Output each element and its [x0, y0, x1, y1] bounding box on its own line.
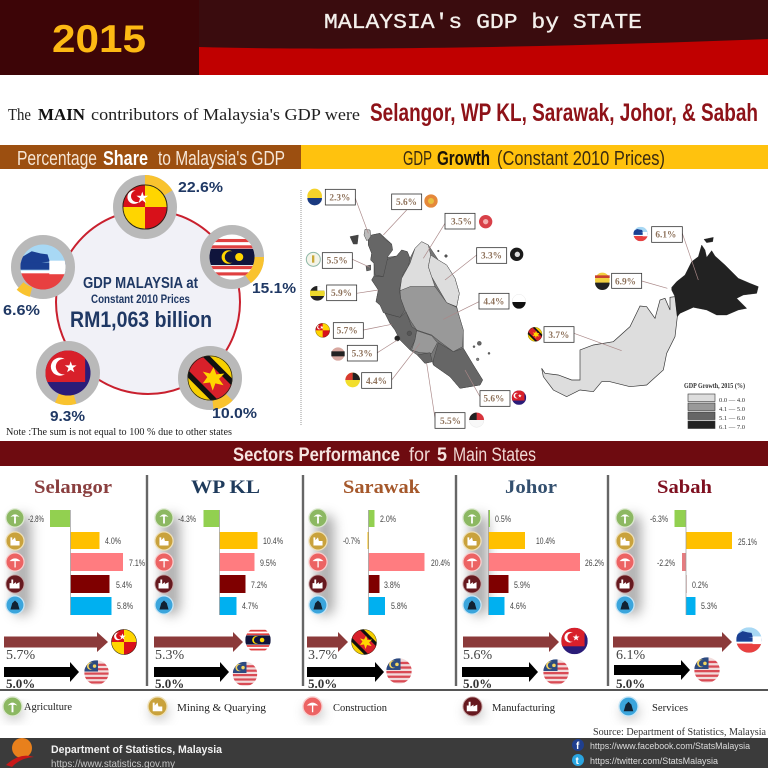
- legend: agriculture: [3, 697, 72, 716]
- state name: Sabah: [657, 477, 712, 498]
- bar chart: 25.1%: [738, 537, 757, 548]
- legend: construction: Construction: [333, 702, 387, 714]
- map legend: 5.1 — 6.0: [719, 415, 745, 422]
- section header: percentage share: Share: [103, 148, 148, 170]
- arrow: state growth: [613, 627, 762, 663]
- year: 2015: [52, 18, 146, 61]
- legend: construction: [303, 697, 387, 716]
- Sarawak shape: [542, 297, 677, 397]
- facebook: https://www.facebook.com/StatsMalaysia: [590, 741, 751, 752]
- panel: Selangor: [4, 477, 145, 691]
- arrow: national growth: [4, 660, 109, 691]
- bar chart: -0.7%: [343, 536, 360, 547]
- badge: Sabah: 6.6%: [3, 302, 40, 319]
- arrow: national growth: 5.0%: [308, 676, 337, 691]
- bar chart: -2.8%: [28, 514, 44, 525]
- bar chart: 7.2%: [251, 580, 267, 591]
- arrow: national growth: 5.0%: [616, 676, 645, 691]
- bar chart: -4.3%: [178, 514, 196, 525]
- headline sentence: contributors of Malaysia's GDP were: [91, 105, 360, 124]
- leader lines: [574, 233, 698, 351]
- bar chart: 5.8%: [391, 601, 407, 612]
- icon column: [616, 509, 641, 615]
- header banner: [0, 0, 768, 75]
- badge: Johor: [41, 346, 95, 425]
- central text: RM1,063 billion: [70, 307, 212, 332]
- title: MALAYSIA's GDP by STATE: [324, 12, 642, 35]
- bar chart: 9.5%: [260, 558, 276, 569]
- label: Johor 5.6%: [480, 390, 526, 406]
- bar chart: 4.0%: [105, 536, 121, 547]
- map: East Malaysia growth: [522, 227, 758, 397]
- badge: Sarawak: [170, 338, 257, 422]
- label: Johor 5.6%: 5.6%: [483, 395, 504, 405]
- label: Melaka 5.5%: [435, 413, 484, 428]
- label: Labuan 6.9%: 6.9%: [615, 277, 636, 287]
- arrow: national growth: [462, 659, 569, 691]
- badge: Sarawak: 10.0%: [212, 405, 257, 422]
- label: Terengganu 3.3%: [477, 248, 523, 263]
- bar chart: [28, 510, 145, 615]
- section header: GDP growth: GDP: [403, 148, 432, 170]
- icon column: [309, 509, 334, 615]
- sector legend: [3, 697, 688, 718]
- bar chart: -2.2%: [657, 558, 675, 569]
- icon column: [6, 509, 31, 615]
- central text: GDP MALAYSIA at: [83, 275, 199, 292]
- footer: [0, 738, 768, 768]
- label: Pahang 4.4%: [479, 293, 526, 309]
- section header: sectors performance: Main States: [453, 445, 536, 466]
- label: Selangor 5.7%: 5.7%: [337, 327, 358, 337]
- source note: Source: Department of Statistics, Malaysia: [593, 727, 766, 738]
- label: Sarawak 3.7%: [522, 322, 574, 347]
- section header: percentage share: to Malaysia's GDP: [158, 148, 285, 170]
- bar chart: 4.7%: [242, 601, 258, 612]
- bar chart: 10.4%: [263, 536, 283, 547]
- arrow: state growth: 5.6%: [463, 648, 492, 663]
- arrow: national growth: 5.0%: [463, 676, 492, 691]
- arrow: state growth: [154, 627, 271, 663]
- label: Perak 5.9%: 5.9%: [331, 289, 352, 299]
- bar chart: 2.0%: [380, 514, 396, 525]
- bar chart: 5.3%: [701, 601, 717, 612]
- label: Labuan 6.9%: [595, 273, 642, 290]
- arrow: state growth: 6.1%: [616, 648, 646, 663]
- legend: services: [619, 697, 688, 716]
- label: Pahang 4.4%: 4.4%: [483, 297, 504, 307]
- arrow: state growth: [4, 629, 137, 663]
- organisation name: Department of Statistics, Malaysia: [51, 744, 223, 756]
- label: Melaka 5.5%: 5.5%: [440, 417, 461, 427]
- arrow: state growth: 3.7%: [308, 648, 338, 663]
- logo: [6, 738, 34, 767]
- map legend: [684, 382, 746, 431]
- legend: agriculture: Agriculture: [24, 701, 72, 713]
- bar chart: [488, 510, 604, 615]
- label: Selangor 5.7%: [315, 323, 363, 338]
- section header: GDP growth: Growth: [437, 148, 490, 170]
- arrow: state growth: [307, 620, 386, 664]
- badge: Selangor: [118, 179, 223, 234]
- bar chart: 20.4%: [431, 558, 450, 569]
- label: Sabah 6.1%: 6.1%: [655, 230, 676, 240]
- central text: [70, 275, 212, 332]
- state shapes: [350, 229, 490, 388]
- bar chart: 10.4%: [536, 536, 555, 547]
- headline sentence: [8, 99, 758, 127]
- section header: GDP growth: (Constant 2010 Prices): [497, 148, 665, 170]
- bar chart: 0.5%: [495, 514, 511, 525]
- label: Terengganu 3.3%: 3.3%: [481, 252, 502, 262]
- legend: mining: Mining & Quarying: [177, 702, 267, 714]
- map: Peninsular Malaysia growth: [306, 189, 526, 428]
- arrow: state growth: 5.3%: [155, 648, 184, 663]
- legend: mining: [148, 697, 267, 716]
- arrow: state growth: [463, 628, 588, 663]
- central circle: [56, 210, 240, 394]
- arrow: national growth: [614, 657, 720, 691]
- arrow: national growth: [307, 658, 412, 691]
- badge: Johor: 9.3%: [50, 408, 85, 425]
- bar chart: [343, 510, 450, 615]
- panel: Sabah: [613, 477, 762, 691]
- section header: sectors performance: [0, 441, 768, 466]
- label: Perlis 2.3%: [307, 189, 355, 205]
- bar chart: 5.8%: [117, 601, 133, 612]
- arrow: national growth: 5.0%: [6, 676, 35, 691]
- bar chart: 5.9%: [514, 580, 530, 591]
- label: Sarawak 3.7%: 3.7%: [548, 331, 569, 341]
- headline sentence: MAIN: [38, 105, 86, 124]
- twitter: https://twitter.com/StatsMalaysia: [590, 756, 719, 767]
- twitter: t: [576, 756, 580, 767]
- state name: Sarawak: [343, 477, 420, 498]
- legend: manufacturing: [463, 697, 555, 716]
- bar chart: [178, 510, 283, 615]
- state name: Selangor: [34, 477, 113, 498]
- bar chart: 26.2%: [585, 558, 604, 569]
- badge: WP Kuala Lumpur: [205, 230, 296, 297]
- central text: Constant 2010 Prices: [91, 292, 190, 306]
- panel: WP KL: [154, 477, 283, 691]
- badge: Selangor: 22.6%: [178, 179, 223, 196]
- panel: Johor: [462, 477, 604, 691]
- badge: WP Kuala Lumpur: 15.1%: [252, 280, 296, 297]
- panel: Sarawak: [307, 477, 450, 691]
- map legend: 0.0 — 4.0: [719, 397, 745, 404]
- state name: WP KL: [191, 477, 260, 498]
- bar chart: 0.2%: [692, 580, 708, 591]
- label: Negeri Sembilan 4.4%: [345, 373, 392, 388]
- label: Kedah 5.6%: [392, 194, 438, 210]
- label: Perlis 2.3%: 2.3%: [329, 193, 350, 203]
- section header: percentage share: Percentage: [17, 148, 97, 170]
- label: Penang 5.5%: [306, 252, 352, 268]
- label: Negeri Sembilan 4.4%: 4.4%: [366, 377, 387, 387]
- arrow: state growth: 5.7%: [6, 648, 36, 663]
- Sabah shape: [672, 237, 758, 317]
- panel: share of GDP ring: [3, 179, 296, 438]
- arrow: national growth: [154, 662, 257, 691]
- map legend: 6.1 — 7.0: [719, 424, 745, 431]
- arrow: national growth: 5.0%: [155, 676, 184, 691]
- label: Kedah 5.6%: 5.6%: [396, 198, 417, 208]
- label: WP KL 5.3%: [331, 345, 377, 361]
- section header: sectors performance: Sectors Performance: [233, 445, 400, 466]
- section header: GDP growth: [301, 145, 768, 170]
- bar chart: 5.4%: [116, 580, 132, 591]
- leader lines: [352, 198, 480, 418]
- note: Note :The sum is not equal to 100 % due to other states: [6, 427, 232, 438]
- label: Perak 5.9%: [310, 285, 357, 301]
- bar chart: 3.8%: [384, 580, 400, 591]
- section header: sectors performance: for: [409, 445, 431, 466]
- label: Kelantan 3.5%: 3.5%: [451, 218, 472, 228]
- legend: manufacturing: Manufacturing: [492, 702, 555, 714]
- label: Kelantan 3.5%: [445, 213, 492, 229]
- label: Sabah 6.1%: [633, 227, 682, 242]
- section header: sectors performance: 5: [437, 445, 447, 466]
- bar chart: [650, 510, 757, 615]
- label: Penang 5.5%: 5.5%: [327, 257, 348, 267]
- icon column: [155, 509, 180, 615]
- map legend: 4.1 — 5.0: [719, 406, 745, 413]
- label: WP KL 5.3%: 5.3%: [352, 349, 373, 359]
- legend: services: Services: [652, 702, 688, 714]
- facebook: f: [576, 741, 580, 752]
- section header: percentage share: [0, 145, 301, 170]
- map legend: GDP Growth, 2015 (%): [684, 382, 746, 390]
- headline sentence: The: [8, 105, 31, 124]
- badge: Sabah: [3, 240, 70, 319]
- bar chart: -6.3%: [650, 514, 668, 525]
- icon column: [463, 509, 488, 615]
- bar chart: 7.1%: [129, 558, 145, 569]
- state name: Johor: [505, 477, 558, 498]
- bar chart: 4.6%: [510, 601, 526, 612]
